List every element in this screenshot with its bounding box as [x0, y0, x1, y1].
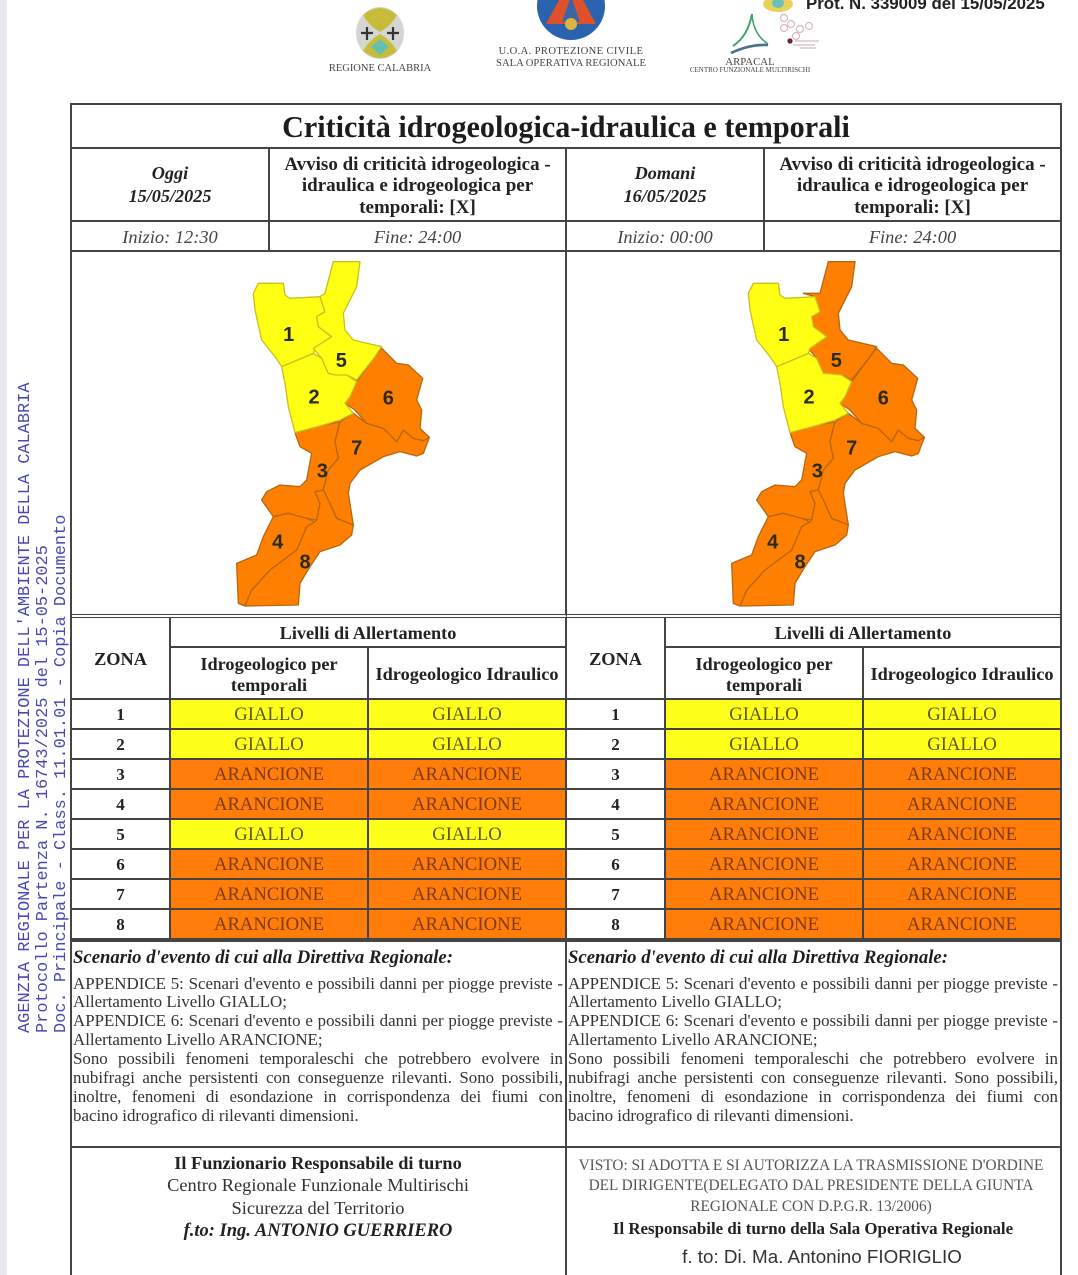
map: tomorrow: 7: [846, 437, 857, 459]
signature: duty officer: f.to: Ing. ANTONIO GUERRIERO: [184, 1221, 452, 1241]
vertical protocol stamp: Doc. Principale - Class. 11.01.01 - Copia Documento: [52, 515, 71, 1033]
column header 1: [666, 648, 864, 700]
zone header: [567, 618, 666, 700]
rows: ARANCIONE: [907, 914, 1017, 935]
rows: ARANCIONE: [412, 764, 522, 785]
signature: authorisation: VISTO: SI ADOTTA E SI AUTORIZZA LA TRASMISSIONE D'ORDINE: [579, 1157, 1043, 1174]
scenario text tomorrow: nubifragi anche persistenti con conseguenze rilevanti. Sono possibili,: [568, 1068, 1058, 1087]
notice tomorrow: Avviso di criticità idrogeologica -: [779, 154, 1046, 175]
rows: 3: [116, 764, 125, 784]
logo: ARPACAL: [690, 0, 819, 74]
rows: 5: [116, 824, 125, 844]
levels header: [666, 618, 1062, 648]
rows: 5: [611, 824, 620, 844]
scenario text today: APPENDICE 5: Scenari d'evento e possibili danni per piogge previste -: [73, 974, 563, 993]
date today: Oggi: [152, 162, 188, 182]
map: today: 6: [383, 388, 394, 410]
levels header: Livelli di Allertamento: [775, 623, 951, 643]
logo: Protezione Civile: SALA OPERATIVA REGIONALE: [496, 58, 646, 69]
vertical protocol stamp: [16, 382, 71, 1033]
rows: ARANCIONE: [907, 854, 1017, 875]
signature: authorisation: DEL DIRIGENTE(DELEGATO DAL PRESIDENTE DELLA GIUNTA: [589, 1177, 1033, 1194]
zone header: [72, 618, 171, 700]
map: tomorrow: 2: [803, 387, 815, 409]
signature: authorisation: f. to: Di. Ma. Antonino FIORIGLIO: [682, 1246, 962, 1267]
rows: ARANCIONE: [412, 884, 522, 905]
panel: today: [72, 149, 567, 1275]
title: [71, 105, 1061, 149]
rows: GIALLO: [234, 734, 304, 755]
rows: GIALLO: [432, 824, 502, 845]
map cell border: [567, 252, 1062, 618]
start time tomorrow: Inizio: 00:00: [617, 227, 713, 247]
signature: duty officer: Il Funzionario Responsabile di turno: [174, 1153, 462, 1173]
rows: ARANCIONE: [907, 794, 1017, 815]
date today: [72, 149, 270, 222]
map: tomorrow: 6: [878, 388, 889, 410]
map: today: 3: [317, 461, 328, 483]
scenario text tomorrow: [567, 940, 1062, 1148]
notice today: idraulica e idrogeologica per: [302, 175, 533, 196]
rows: 6: [611, 854, 620, 874]
map: today: 1: [283, 324, 294, 346]
rows: 3: [611, 764, 620, 784]
rows: GIALLO: [729, 734, 799, 755]
rows: 2: [611, 734, 620, 754]
signature: duty officer: Sicurezza del Territorio: [231, 1198, 405, 1218]
date today: 15/05/2025: [129, 186, 211, 206]
scenario text tomorrow: Scenario d'evento di cui alla Direttiva Regionale:: [568, 947, 948, 968]
scenario text today: Sono possibili fenomeni temporaleschi che potrebbero evolvere in: [73, 1049, 563, 1068]
scenario text today: Scenario d'evento di cui alla Direttiva Regionale:: [73, 947, 453, 968]
notice tomorrow: idraulica e idrogeologica per: [797, 175, 1028, 196]
rows: GIALLO: [432, 734, 502, 755]
map: today: 5: [336, 350, 347, 372]
rows: 1: [611, 704, 620, 724]
rows: GIALLO: [927, 704, 997, 725]
rows: 1: [116, 704, 125, 724]
levels header: Livelli di Allertamento: [280, 623, 456, 643]
start time tomorrow: [567, 222, 765, 252]
rows: 7: [116, 884, 125, 904]
column header 1: temporali: [231, 674, 307, 694]
rows: GIALLO: [234, 824, 304, 845]
rows: ARANCIONE: [214, 794, 324, 815]
rows: GIALLO: [234, 704, 304, 725]
rows: GIALLO: [729, 704, 799, 725]
rows: ARANCIONE: [214, 884, 324, 905]
rows: GIALLO: [432, 704, 502, 725]
map: today: 4: [272, 532, 284, 554]
rows: ARANCIONE: [214, 914, 324, 935]
rows: 8: [611, 914, 620, 934]
end time today: Fine: 24:00: [374, 227, 461, 247]
rows: ARANCIONE: [709, 824, 819, 845]
zone header: ZONA: [589, 649, 642, 669]
column header 1: Idrogeologico per: [200, 654, 338, 674]
signature: authorisation: [567, 1148, 1062, 1275]
column header 1: Idrogeologico per: [695, 654, 833, 674]
zone header: ZONA: [94, 649, 147, 669]
map: tomorrow: 8: [794, 552, 806, 574]
map: today: 7: [351, 437, 362, 459]
scenario text tomorrow: Allertamento Livello ARANCIONE;: [568, 1030, 818, 1049]
map: tomorrow: [731, 261, 925, 607]
scenario text tomorrow: APPENDICE 5: Scenari d'evento e possibili danni per piogge previste -: [568, 974, 1058, 993]
rows: 4: [116, 794, 125, 814]
signature: duty officer: Centro Regionale Funzionale Multirischi: [167, 1175, 469, 1195]
logo: Protezione Civile: [496, 0, 646, 69]
end time tomorrow: [765, 222, 1062, 252]
notice today: temporali: [X]: [359, 197, 476, 218]
rows: ARANCIONE: [412, 914, 522, 935]
map: today: 2: [308, 387, 320, 409]
scenario text tomorrow: APPENDICE 6: Scenari d'evento e possibili danni per piogge previste -: [568, 1011, 1058, 1030]
rows: ARANCIONE: [709, 764, 819, 785]
date tomorrow: [567, 149, 765, 222]
column header 2: [864, 648, 1062, 700]
rows: ARANCIONE: [214, 854, 324, 875]
rows: GIALLO: [927, 734, 997, 755]
start time today: [72, 222, 270, 252]
rows: 4: [611, 794, 620, 814]
rows: ARANCIONE: [412, 794, 522, 815]
rows: ARANCIONE: [907, 824, 1017, 845]
notice tomorrow: temporali: [X]: [854, 197, 971, 218]
column header 2: Idrogeologico Idraulico: [376, 664, 558, 684]
scenario text today: nubifragi anche persistenti con conseguenze rilevanti. Sono possibili,: [73, 1068, 563, 1087]
map: tomorrow: 5: [831, 350, 842, 372]
signature: authorisation: Il Responsabile di turno della Sala Operativa Regionale: [613, 1219, 1013, 1238]
logo: Regione Calabria: [329, 7, 432, 74]
rows: 2: [116, 734, 125, 754]
map: tomorrow: 1: [778, 324, 789, 346]
rows: 7: [611, 884, 620, 904]
notice tomorrow: [765, 149, 1062, 222]
map: today: [236, 261, 430, 607]
column header 2: [369, 648, 567, 700]
rows: [567, 700, 1060, 940]
end time today: [270, 222, 567, 252]
rows: 6: [116, 854, 125, 874]
scenario text today: [72, 940, 567, 1148]
map: today: 8: [299, 552, 311, 574]
rows: 8: [116, 914, 125, 934]
rows: ARANCIONE: [214, 764, 324, 785]
notice today: [270, 149, 567, 222]
panel: tomorrow: [567, 149, 1060, 1267]
date tomorrow: Domani: [635, 162, 695, 182]
rows: ARANCIONE: [907, 764, 1017, 785]
alert table tomorrow: [567, 618, 1060, 940]
map: tomorrow: 3: [812, 461, 823, 483]
title: Criticità idrogeologica-idraulica e temporali: [282, 110, 850, 144]
logo: Protezione Civile: U.O.A. PROTEZIONE CIVILE: [499, 46, 643, 57]
logo: Regione Calabria: REGIONE CALABRIA: [329, 63, 431, 74]
column header 1: [171, 648, 369, 700]
start time today: Inizio: 12:30: [122, 227, 218, 247]
scenario text today: APPENDICE 6: Scenari d'evento e possibili danni per piogge previste -: [73, 1011, 563, 1030]
scenario text tomorrow: Allertamento Livello GIALLO;: [568, 992, 782, 1011]
scenario text tomorrow: inoltre, fenomeni di esondazione in corrispondenza dei fiumi con: [568, 1087, 1058, 1106]
date tomorrow: 16/05/2025: [624, 186, 706, 206]
logo: ARPACAL: CENTRO FUNZIONALE MULTIRISCHI: [690, 66, 810, 74]
levels header: [171, 618, 567, 648]
scenario text today: bacino idrografico di rilevanti dimensioni.: [73, 1106, 359, 1125]
vertical protocol stamp: Protocollo Partenza N. 16743/2025 del 15-05-2025: [34, 545, 53, 1033]
scenario text today: Allertamento Livello ARANCIONE;: [73, 1030, 323, 1049]
alert table today: [72, 618, 567, 940]
rows: ARANCIONE: [709, 854, 819, 875]
notice today: Avviso di criticità idrogeologica -: [284, 154, 551, 175]
rows: ARANCIONE: [709, 884, 819, 905]
logo: ARPACAL: ARPACAL: [725, 56, 775, 68]
left edge scan strip: [0, 0, 7, 1275]
signature: authorisation: REGIONALE CON D.P.G.R. 13/2006): [690, 1198, 932, 1215]
end time tomorrow: Fine: 24:00: [869, 227, 956, 247]
signature: duty officer: [72, 1148, 567, 1275]
rows: ARANCIONE: [709, 914, 819, 935]
scenario text today: Allertamento Livello GIALLO;: [73, 992, 287, 1011]
scenario text tomorrow: Sono possibili fenomeni temporaleschi che potrebbero evolvere in: [568, 1049, 1058, 1068]
scenario text tomorrow: bacino idrografico di rilevanti dimensioni.: [568, 1106, 854, 1125]
rows: ARANCIONE: [709, 794, 819, 815]
scenario text today: inoltre, fenomeni di esondazione in corrispondenza dei fiumi con: [73, 1087, 563, 1106]
rows: [72, 700, 567, 940]
map: tomorrow: 4: [767, 532, 779, 554]
rows: ARANCIONE: [412, 854, 522, 875]
vertical protocol stamp: AGENZIA REGIONALE PER LA PROTEZIONE DELL'AMBIENTE DELLA CALABRIA: [16, 382, 35, 1033]
column header 2: Idrogeologico Idraulico: [870, 664, 1053, 684]
column header 1: temporali: [726, 674, 802, 694]
map cell border: [72, 252, 567, 618]
rows: ARANCIONE: [907, 884, 1017, 905]
